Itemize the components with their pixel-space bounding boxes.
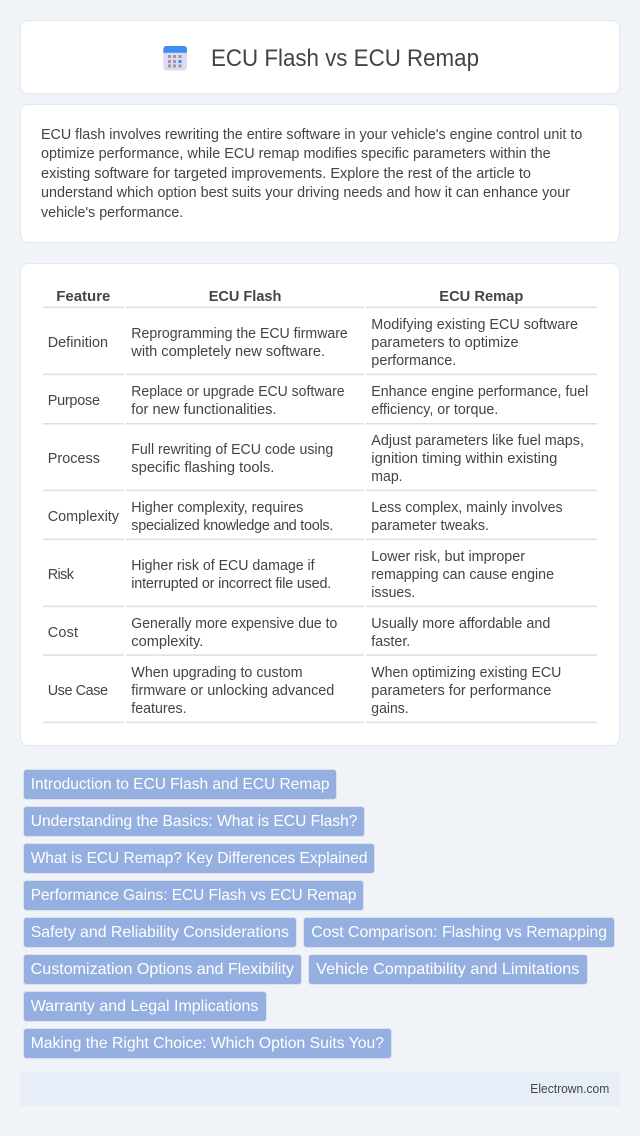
row: Definition: parameters to optimize — [371, 335, 519, 351]
intro text: vehicle's performance. — [41, 205, 183, 221]
row: Definition: Reprogramming the ECU firmware — [131, 326, 348, 342]
icon: calendar grid — [163, 46, 187, 70]
row: Use Case: parameters for performance — [371, 683, 551, 699]
footer credit: Electrown.com — [530, 1082, 609, 1096]
tag — [24, 954, 302, 984]
tag: Introduction to ECU Flash and ECU Remap — [31, 776, 330, 793]
row: Process: Adjust parameters like fuel maps, — [371, 433, 584, 449]
row: Process — [43, 433, 597, 491]
topic tags — [23, 769, 615, 1059]
row: Purpose: Purpose — [48, 393, 100, 409]
row: Use Case: When upgrading to custom — [131, 665, 303, 681]
tag: Vehicle Compatibility and Limitations — [316, 961, 579, 978]
row: Process: Process — [48, 451, 100, 467]
row: Purpose: Replace or upgrade ECU software — [131, 384, 345, 400]
row: Complexity: specialized knowledge and tools. — [131, 518, 333, 534]
row: Complexity: parameter tweaks. — [371, 518, 489, 534]
row: Definition: with completely new software. — [130, 344, 325, 360]
row: Complexity: Higher complexity, requires — [131, 500, 303, 516]
tag — [24, 1028, 392, 1058]
row: Cost: Generally more expensive due to — [131, 616, 337, 632]
row: Definition: Modifying existing ECU software — [371, 317, 578, 333]
row: Risk: Risk — [48, 567, 75, 583]
tag: Safety and Reliability Considerations — [31, 924, 289, 941]
comparison table panel — [20, 263, 620, 746]
intro text: existing software for targeted improvements. Explore the rest of the article to — [41, 166, 531, 182]
row: Process: map. — [371, 469, 403, 485]
tag: What is ECU Remap? Key Differences Explained — [31, 850, 367, 867]
title: ECU Flash vs ECU Remap — [211, 45, 479, 72]
row: Cost: complexity. — [131, 634, 203, 650]
tag — [24, 918, 296, 948]
row: Complexity: Less complex, mainly involves — [371, 500, 563, 516]
tag — [24, 844, 374, 874]
row: Cost — [43, 616, 597, 656]
intro text: understand which option best suits your driving needs and how it can enhance your — [41, 185, 570, 201]
table header row — [43, 288, 597, 308]
intro text: optimize performance, while ECU remap modifies specific parameters within the — [41, 146, 551, 162]
tag — [24, 992, 266, 1022]
row: Purpose — [43, 384, 597, 424]
row: Process: ignition timing within existing — [371, 451, 557, 467]
intro panel — [20, 104, 620, 243]
row: Process: specific flashing tools. — [131, 460, 274, 476]
table header row: ECU Flash — [209, 288, 281, 305]
row: Risk: Lower risk, but improper — [371, 549, 525, 565]
tag — [308, 954, 588, 984]
header panel — [20, 20, 620, 94]
row: Risk: interrupted or incorrect file used. — [131, 576, 331, 592]
row: Complexity — [43, 500, 597, 540]
tag — [24, 806, 364, 836]
row: Use Case: features. — [131, 701, 187, 717]
row: Risk — [43, 549, 597, 607]
table header row: ECU Remap — [439, 288, 523, 305]
tag: Cost Comparison: Flashing vs Remapping — [311, 924, 607, 941]
row: Definition: performance. — [371, 353, 456, 369]
intro text — [41, 127, 582, 221]
row: Process: Full rewriting of ECU code using — [131, 442, 333, 458]
row: Use Case: Use Case — [48, 683, 108, 699]
footer bar — [20, 1072, 620, 1106]
tag: Performance Gains: ECU Flash vs ECU Remap — [31, 887, 357, 904]
row: Complexity: Complexity — [48, 509, 120, 525]
tag — [24, 770, 336, 800]
row: Risk: issues. — [371, 585, 415, 601]
tag: Understanding the Basics: What is ECU Flash? — [31, 813, 358, 830]
row: Risk: Higher risk of ECU damage if — [131, 558, 316, 574]
tag: Warranty and Legal Implications — [31, 998, 258, 1015]
tag — [24, 880, 364, 910]
row: Cost: faster. — [371, 634, 410, 650]
tag: Customization Options and Flexibility — [31, 961, 294, 978]
row: Purpose: Enhance engine performance, fuel — [371, 384, 588, 400]
row: Definition: Definition — [48, 335, 108, 351]
tag — [304, 918, 614, 948]
table header row: Feature — [56, 288, 110, 305]
row: Cost: Cost — [48, 625, 78, 641]
row: Cost: Usually more affordable and — [371, 616, 550, 632]
intro text: ECU flash involves rewriting the entire software in your vehicle's engine control unit to — [41, 127, 582, 143]
row: Definition — [43, 317, 597, 375]
tag: Making the Right Choice: Which Option Suits You? — [31, 1035, 384, 1052]
row: Use Case: gains. — [371, 701, 409, 717]
row: Purpose: for new functionalities. — [131, 402, 277, 418]
row: Use Case — [43, 665, 597, 723]
row: Purpose: efficiency, or torque. — [371, 402, 498, 418]
row: Use Case: firmware or unlocking advanced — [131, 683, 334, 699]
row: Use Case: When optimizing existing ECU — [371, 665, 561, 681]
row: Risk: remapping can cause engine — [371, 567, 554, 583]
